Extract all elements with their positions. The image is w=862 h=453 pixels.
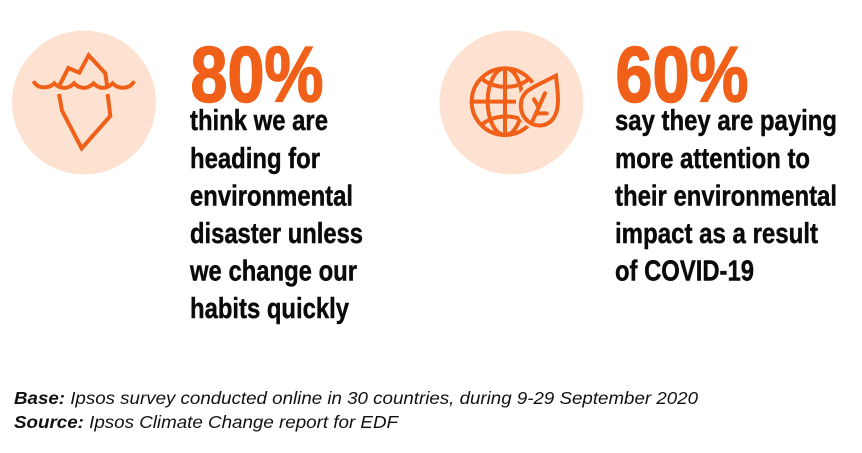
panel: 80 percent statistic bbox=[12, 30, 363, 325]
text: 80 percent description: habits quickly bbox=[190, 293, 349, 325]
panel: 60 percent statistic bbox=[440, 30, 837, 288]
text: 60 percent description: of COVID-19 bbox=[615, 256, 754, 288]
text: 80 percent description: environmental bbox=[190, 180, 353, 212]
text: 80 percent description: heading for bbox=[190, 143, 320, 175]
text: 60 percent description: impact as a result bbox=[615, 218, 818, 250]
text: 60 percent description: more attention to bbox=[615, 143, 810, 175]
footnote: base and source: Base: Ipsos survey conducted online in 30 countries, during 9-29 September 2020 bbox=[14, 388, 698, 408]
stat: 60%: 60% bbox=[616, 30, 748, 118]
footnote: base and source: Source: Ipsos Climate Change report for EDF bbox=[14, 412, 400, 432]
text: 80 percent description: we change our bbox=[189, 256, 357, 288]
text: 80 percent description: think we are bbox=[190, 105, 328, 137]
stat: 80%: 80% bbox=[190, 30, 324, 118]
icon: iceberg in peach circle bbox=[12, 30, 156, 174]
footnote: base and source bbox=[14, 388, 698, 432]
text: 60 percent description bbox=[615, 105, 837, 288]
text: 80 percent description: disaster unless bbox=[190, 218, 363, 250]
text: 80 percent description bbox=[189, 105, 363, 325]
icon: globe and leaf in peach circle bbox=[440, 30, 584, 174]
